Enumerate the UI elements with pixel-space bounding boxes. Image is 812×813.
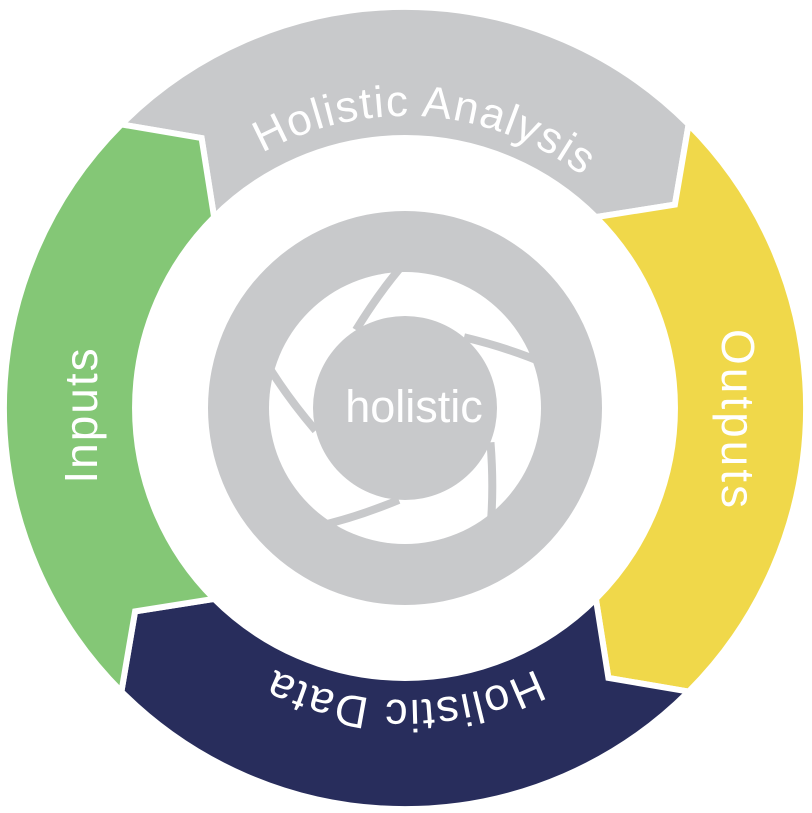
label: outputs: Outputs (712, 329, 764, 511)
segment: outputs (596, 124, 806, 692)
icon: swirl blades (249, 260, 546, 557)
segment: holistic data (124, 600, 688, 806)
label: inputs: Inputs (55, 346, 107, 484)
label: holistic analysis: Holistic Analysis (252, 85, 592, 172)
segment: holistic analysis (128, 10, 686, 214)
label: holistic data: Holistic Data (270, 670, 546, 732)
segment: inputs (4, 124, 214, 692)
wordmark: holistic: holistic (345, 381, 483, 432)
center logo (208, 211, 602, 605)
